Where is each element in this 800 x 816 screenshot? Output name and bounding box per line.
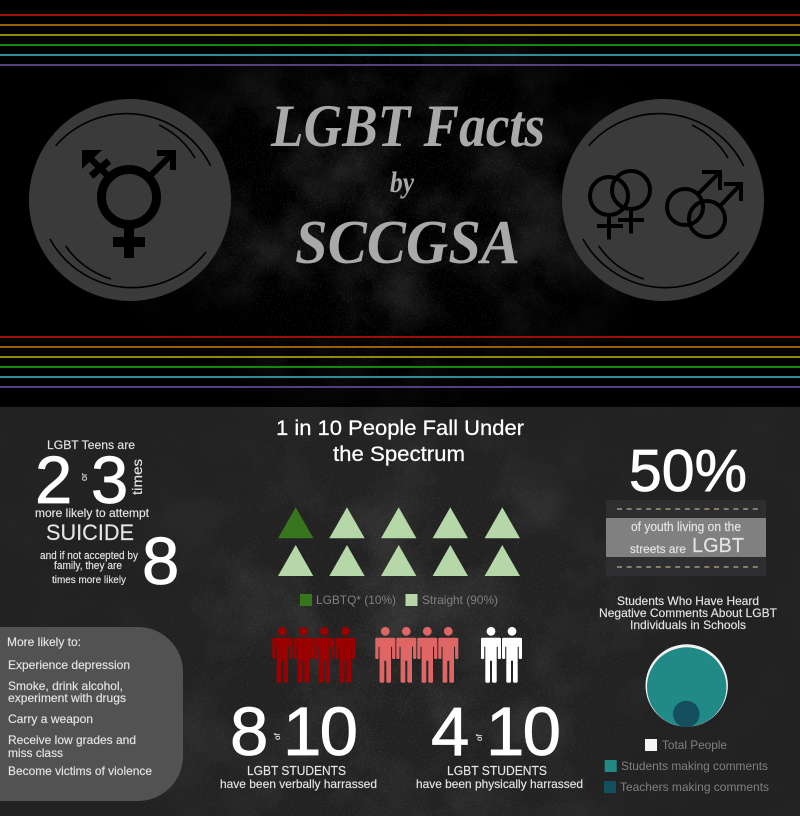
stat: 50%: 50% <box>629 438 747 504</box>
stat: 8 of 10: have been verbally harrassed <box>220 777 377 791</box>
triangle chart legend: Straight (90%) <box>422 593 498 607</box>
panel: more likely to <box>0 627 183 801</box>
panel: more likely to: More likely to: <box>7 635 81 649</box>
suicide statistics text block: SUICIDE <box>46 520 134 545</box>
icon: transgender symbol badge <box>29 99 231 301</box>
triangle chart legend: LGBTQ* (10%) <box>316 593 396 607</box>
panel: more likely to: Become victims of violence <box>8 764 152 778</box>
stat: 4 of 10: LGBT STUDENTS <box>447 763 547 778</box>
rainbow lines: bottom <box>0 337 800 387</box>
suicide statistics text block: or <box>79 473 89 481</box>
ribbon: youth living on the streets: of youth living on the <box>631 520 741 534</box>
heading: negative comments: Individuals in Schools <box>630 618 746 632</box>
footer panel background <box>0 407 800 816</box>
suicide statistics text block: 2 <box>35 443 72 518</box>
suicide statistics text block: 8 <box>142 524 179 599</box>
stat: 8 of 10: of <box>273 733 282 740</box>
header background <box>184 36 620 399</box>
stat: 4 of 10: of <box>475 734 484 741</box>
suicide statistics text block: more likely to attempt <box>35 506 150 520</box>
panel: more likely to: experiment with drugs <box>8 691 126 705</box>
stat: 4 of 10: 4 <box>431 693 469 770</box>
stat: 8 of 10: 8 <box>230 693 268 770</box>
circle chart legend <box>604 738 769 794</box>
heading: negative comments: Negative Comments About LGBT <box>599 606 778 620</box>
panel: more likely to: miss class <box>8 746 63 760</box>
title: LGBT Facts <box>270 93 545 159</box>
ribbon: youth living on the streets: streets are <box>630 542 686 556</box>
panel: more likely to: Receive low grades and <box>8 733 136 747</box>
suicide statistics text block: and if not accepted by <box>40 550 138 562</box>
icon: same-sex couples badge <box>562 99 764 301</box>
suicide statistics text block <box>35 438 179 599</box>
triangle chart: 1 in 10 <box>278 507 520 576</box>
suicide statistics text block: times <box>129 459 145 495</box>
stat: 4 of 10 <box>416 693 583 791</box>
stat: 8 of 10: 10 <box>283 693 358 770</box>
nested circle chart <box>646 644 728 727</box>
heading: 1 in 10: the Spectrum <box>333 442 465 466</box>
heading: negative comments: Students Who Have Heard <box>617 594 759 608</box>
title: by <box>390 166 415 199</box>
suicide statistics text block: 3 <box>91 443 128 518</box>
stat: 4 of 10: have been physically harrassed <box>416 777 583 791</box>
heading: 1 in 10 <box>276 416 524 466</box>
circle chart legend: Total People <box>662 738 727 752</box>
ribbon: youth living on the streets <box>606 500 766 576</box>
panel: more likely to: Carry a weapon <box>8 712 93 726</box>
ribbon: youth living on the streets: LGBT <box>692 535 744 557</box>
panel: more likely to: Experience depression <box>8 658 130 672</box>
stat: 4 of 10: 10 <box>486 693 561 770</box>
heading: 1 in 10: 1 in 10 People Fall Under <box>276 416 524 440</box>
people icons: remainder (white) <box>481 627 522 683</box>
heading: negative comments <box>599 594 778 632</box>
people icons: physically harassed (pink) <box>375 627 458 683</box>
rainbow lines: top <box>0 15 800 65</box>
suicide statistics text block: times more likely <box>52 574 127 586</box>
suicide statistics text block: family, they are <box>54 560 122 572</box>
circle chart legend: Students making comments <box>621 759 768 773</box>
title: SCCGSA <box>295 209 520 277</box>
triangle chart legend <box>300 593 498 607</box>
panel: more likely to: Smoke, drink alcohol, <box>8 679 123 693</box>
circle chart legend: Teachers making comments <box>620 780 769 794</box>
title <box>270 93 545 277</box>
people icons: verbally harassed (dark red) <box>272 627 355 683</box>
stat: 8 of 10 <box>220 693 377 791</box>
suicide statistics text block: LGBT Teens are <box>47 438 135 452</box>
stat: 8 of 10: LGBT STUDENTS <box>247 763 346 778</box>
